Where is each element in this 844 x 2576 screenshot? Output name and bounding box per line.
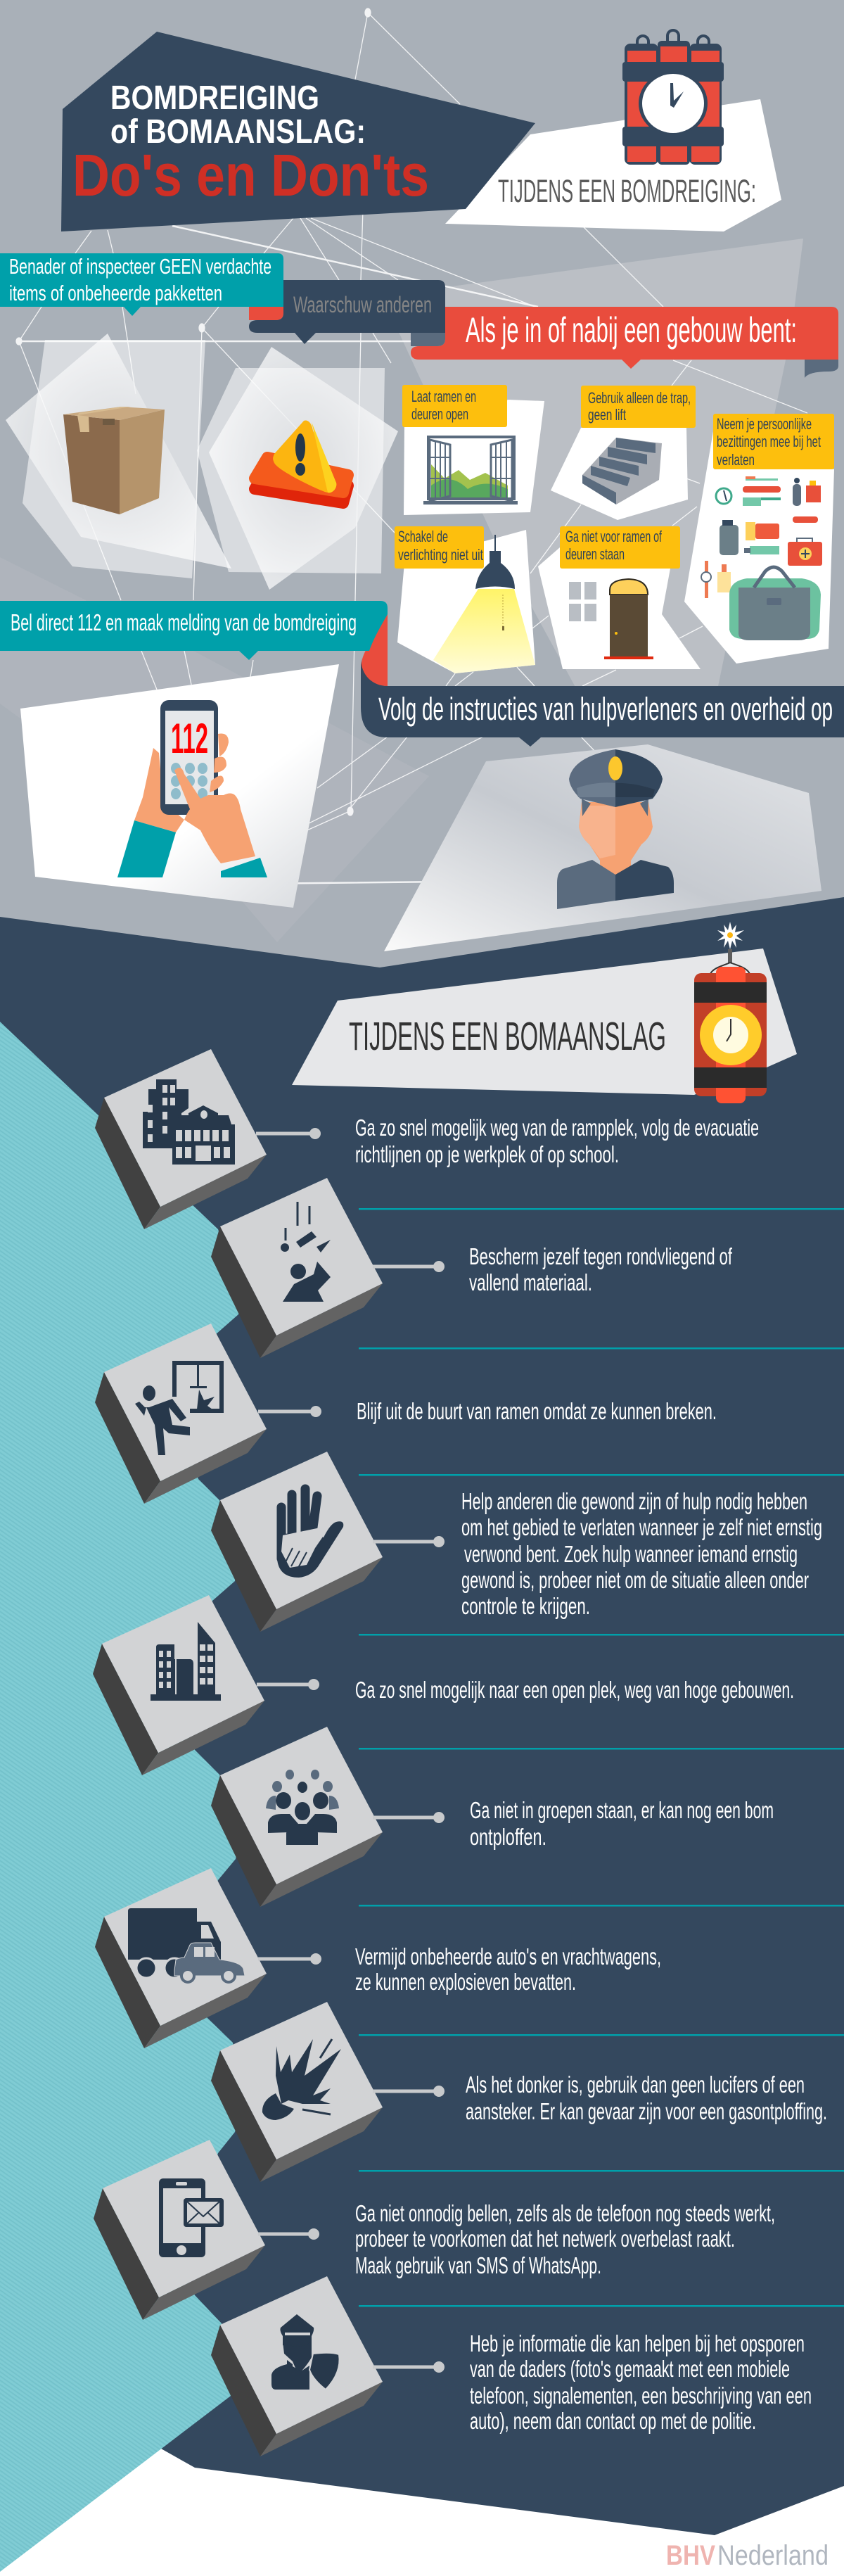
text: step 9: Maak gebruik van SMS of WhatsApp. (355, 2252, 601, 2278)
text: step 8 (466, 2071, 827, 2124)
logo: BHV Nederland: Nederland (717, 2540, 829, 2571)
icon: warning triangle (255, 421, 348, 503)
banner: bel direct 112: Bel direct 112 en maak melding van de bomdreiging (11, 609, 357, 635)
logo: BHV Nederland: BHV (666, 2540, 715, 2571)
banner: waarschuw anderen: Waarschuw anderen (293, 292, 432, 317)
text: step 2: vallend materiaal. (469, 1269, 592, 1295)
banner: benader: items of onbeheerde pakketten (9, 281, 222, 305)
panel: stairs: Gebruik alleen de trap, (588, 389, 691, 407)
icon: truck and car (128, 1908, 245, 1982)
icon: falling material (281, 1202, 331, 1302)
banner: bel direct 112 (0, 601, 388, 686)
background: light teal zigzag (0, 1022, 243, 2572)
banner: als je in of nabij een gebouw bent (411, 307, 838, 378)
text: step 10 (470, 2330, 812, 2434)
panel: glass parcel (6, 334, 231, 578)
title: of BOMAANSLAG: (110, 113, 366, 151)
icon: dynamite with clock (622, 30, 724, 165)
icons: personal items (701, 476, 822, 640)
step 8: no flames (211, 2002, 827, 2182)
icon: police officer and shield (271, 2314, 340, 2390)
icon: running from window (135, 1361, 224, 1455)
panel: window: deuren open (411, 405, 468, 423)
step 7: vehicles (95, 1868, 661, 2048)
text: step 7: Vermijd onbeheerde auto's en vrachtwagens, (355, 1943, 661, 1969)
text: step 7: ze kunnen explosieven bevatten. (355, 1969, 576, 1995)
panel: window: Laat ramen en (411, 388, 476, 405)
icon: open window (423, 437, 518, 505)
logo: BHV Nederland (666, 2540, 829, 2571)
panel: belongings (684, 414, 834, 664)
step 3: stay away from windows (95, 1324, 717, 1504)
banner: benader: Benader of inspecteer GEEN verdachte (9, 254, 271, 279)
panel: door: deuren staan (565, 545, 625, 563)
icon: phone with hands (117, 700, 267, 877)
text: step 4 (461, 1488, 822, 1619)
panel: officer backdrop (384, 744, 821, 951)
icon: police officer (557, 749, 674, 909)
panel: lamp (395, 526, 535, 673)
panel: window (402, 385, 544, 515)
step 5: open space (93, 1595, 794, 1775)
background: grey upper section (0, 0, 844, 985)
panel: white backing behind subtitle (445, 99, 781, 231)
panel: door (538, 526, 701, 669)
network lines (16, 8, 807, 888)
banner: benader (0, 253, 283, 316)
panel: stairs (551, 386, 696, 520)
panel: door: Ga niet voor ramen of (565, 528, 663, 545)
background: light facets (0, 239, 803, 942)
icon: tall buildings (151, 1622, 221, 1701)
text: step 1: richtlijnen op je werkplek of op school. (355, 1141, 619, 1167)
title: Do's en Don'ts (72, 142, 429, 208)
banner: volg de instructies (361, 658, 844, 747)
icon: helping hands (277, 1489, 343, 1578)
teal dividers (359, 1208, 844, 2307)
panel: glass warning (197, 347, 398, 590)
panel: tijdens een bomaanslag heading (292, 948, 797, 1095)
step 2: falling debris (211, 1178, 733, 1358)
text: step 6 (470, 1797, 774, 1850)
icon: hanging lamp (433, 535, 535, 673)
banner: waarschuw anderen (249, 280, 445, 344)
step 1: leave the disaster site (95, 1049, 759, 1229)
panel: lamp: verlichting niet uit (398, 546, 483, 564)
title (72, 80, 429, 208)
panel: phone backdrop (20, 664, 339, 908)
step 4: help others (211, 1452, 822, 1632)
panel: stairs: geen lift (588, 406, 626, 424)
step 6: no groups (211, 1727, 774, 1907)
text: step 6: ontploffen. (470, 1824, 546, 1850)
text: step 9 (355, 2200, 775, 2278)
icon: stairs (582, 438, 662, 505)
icon: city and school (143, 1079, 235, 1165)
panel: lamp: Schakel de (398, 528, 448, 545)
icon: lit dynamite (694, 922, 767, 1103)
text: step 4: controle te krijgen. (461, 1593, 590, 1619)
icon: phone with envelope (159, 2178, 224, 2257)
icon: cardboard box (63, 407, 165, 514)
panel: belongings: verlaten (717, 451, 755, 469)
text: step 2 (469, 1243, 733, 1295)
text: step 1 (355, 1115, 759, 1167)
title: BOMDREIGING (110, 80, 319, 117)
icon: phone with hands: 112 (171, 715, 208, 762)
icon: explosion (262, 2039, 341, 2120)
icon: crowd (266, 1770, 339, 1845)
icon: window and door (569, 579, 653, 659)
panel: title shape (61, 32, 535, 231)
step 10: contact police (211, 2276, 812, 2456)
step 9: do not call (94, 2140, 775, 2320)
text: step 7 (355, 1943, 661, 1995)
section background: navy (0, 897, 844, 2535)
